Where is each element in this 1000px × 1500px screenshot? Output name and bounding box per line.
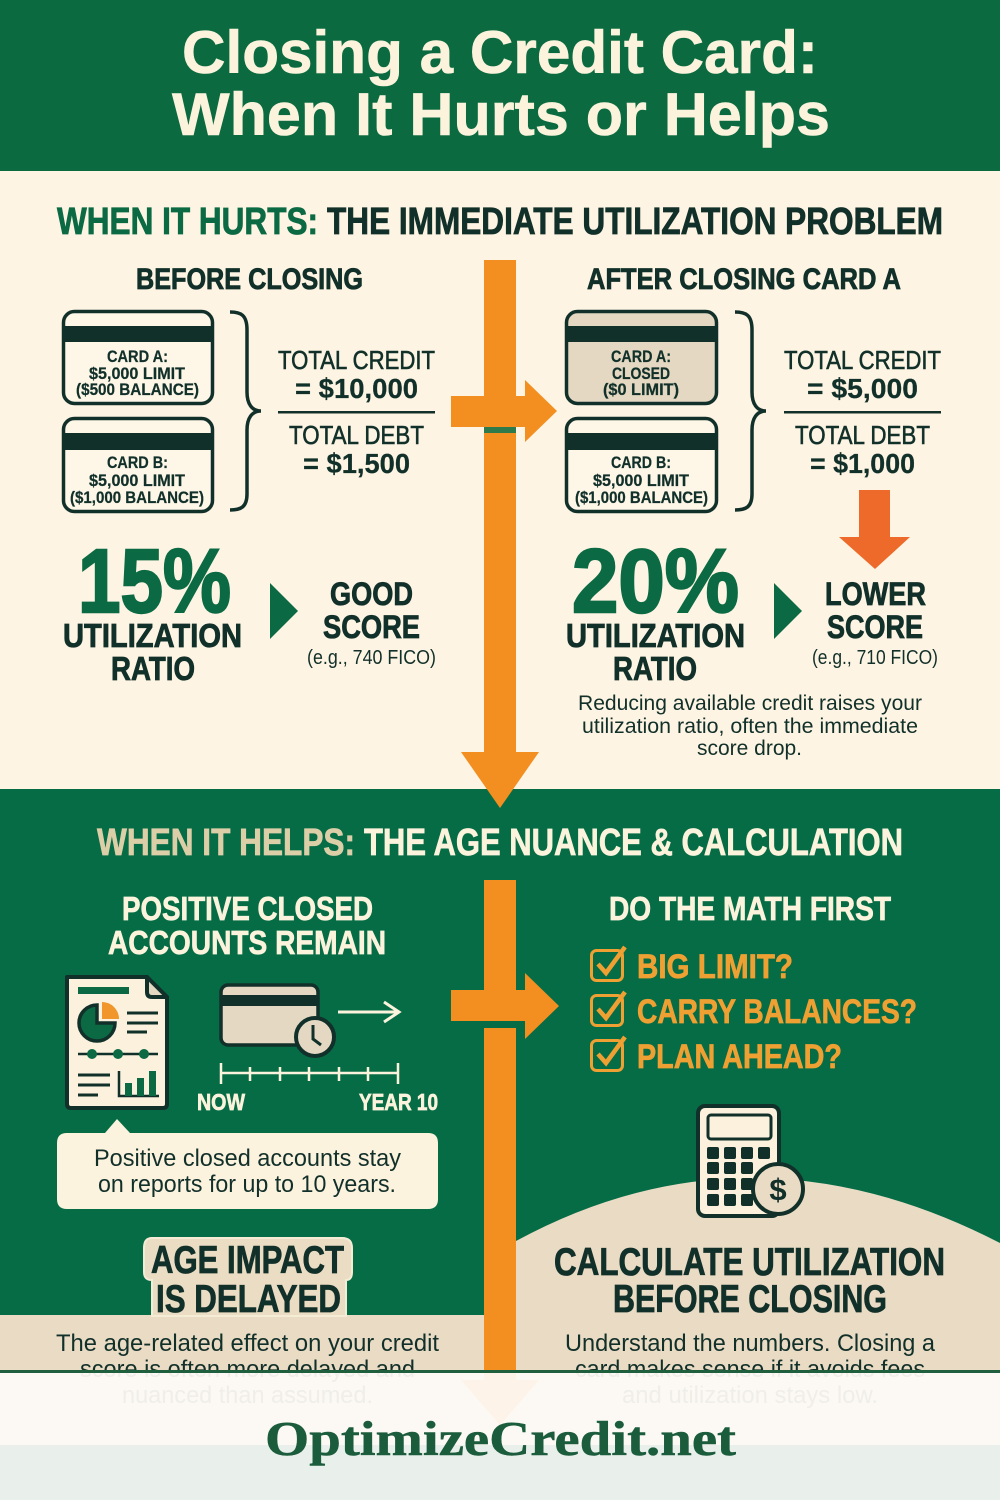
arrow: vertical top with head — [461, 260, 539, 808]
result: good score: SCORE — [323, 609, 420, 645]
card: card B before: CARD B: — [107, 453, 168, 472]
callout: closed accounts on reports: Positive closed accounts stay — [94, 1145, 401, 1172]
stat: 15 percent utilization: UTILIZATION — [63, 617, 242, 654]
green notch: top — [484, 427, 516, 433]
card: card A closed: CLOSED — [612, 364, 670, 383]
body text: understand the numbers — [565, 1330, 936, 1409]
body text: age effect: score is often more delayed and — [80, 1356, 415, 1383]
footer — [0, 1370, 1000, 1500]
card: card A closed — [566, 312, 716, 404]
arrow: horizontal top — [451, 380, 557, 442]
header band — [0, 0, 1000, 171]
stat: 20 percent utilization: 20% — [572, 532, 739, 632]
card: card A before: ($500 BALANCE) — [76, 380, 199, 399]
panel: when it hurts — [0, 171, 1000, 789]
heading: before closing: BEFORE CLOSING — [136, 263, 363, 296]
arrow: score falls — [839, 490, 910, 569]
stat: 20 percent utilization: RATIO — [613, 650, 697, 687]
green notch: bottom — [484, 1021, 516, 1028]
arrow: vertical bottom with faded head — [461, 880, 539, 1425]
totals: after: TOTAL DEBT — [795, 420, 930, 450]
timeline: YEAR 10 — [359, 1089, 438, 1115]
check item: plan ahead — [592, 1037, 842, 1076]
caption: utilization explanation: score drop. — [697, 737, 802, 760]
stat: 20 percent utilization: UTILIZATION — [566, 617, 745, 654]
arrow: to lower score — [774, 583, 802, 639]
brace: before — [230, 312, 261, 510]
timeline — [197, 1063, 438, 1115]
stat: 15 percent utilization: 15% — [78, 532, 231, 632]
heading: after closing card A: AFTER CLOSING CARD A — [587, 263, 901, 296]
card: card A before: $5,000 LIMIT — [89, 364, 186, 383]
check item: big limit: BIG LIMIT? — [637, 948, 793, 986]
card: card B after: $5,000 LIMIT — [593, 471, 690, 490]
result: lower score — [812, 576, 938, 669]
totals: after: = $1,000 — [810, 448, 915, 479]
title — [172, 19, 830, 148]
body text: age effect: The age-related effect on your credit — [56, 1330, 439, 1357]
heading: positive closed accounts remain: POSITIVE CLOSED — [122, 890, 373, 927]
card: card B after: CARD B: — [611, 453, 671, 472]
body text: understand the numbers: card makes sense if it avoids fees — [575, 1356, 925, 1383]
strip under footer — [484, 1371, 516, 1445]
totals: before: = $1,500 — [303, 448, 410, 479]
card: card B before — [64, 418, 212, 512]
totals: before: = $10,000 — [295, 373, 418, 404]
icon: credit report document — [67, 977, 167, 1108]
totals: before: TOTAL DEBT — [289, 420, 424, 450]
heading: when it hurts — [57, 201, 943, 243]
card: card B after: ($1,000 BALANCE) — [575, 488, 708, 507]
caption: utilization explanation: Reducing available credit raises your — [578, 692, 922, 715]
result: good score: GOOD — [330, 576, 413, 612]
timeline: NOW — [197, 1089, 245, 1115]
caption: utilization explanation: utilization ratio, often the immediate — [582, 715, 918, 738]
result: lower score: (e.g., 710 FICO) — [812, 647, 938, 669]
body text: age effect — [56, 1330, 439, 1409]
body text: age effect: nuanced than assumed. — [122, 1382, 373, 1409]
callout: closed accounts on reports: on reports for up to 10 years. — [98, 1171, 396, 1198]
card: card B after — [566, 418, 716, 512]
stat: 15 percent utilization: RATIO — [111, 650, 195, 687]
card: card A before — [64, 312, 212, 404]
check item: big limit — [592, 947, 793, 986]
card: card A closed: CARD A: — [611, 347, 671, 366]
stat: 15 percent utilization — [63, 532, 242, 687]
heading: when it hurts: WHEN IT HURTS: — [57, 201, 318, 243]
heading: when it helps — [97, 822, 903, 864]
caption: utilization explanation — [578, 692, 922, 760]
totals: before: TOTAL CREDIT — [278, 345, 435, 375]
result: lower score: LOWER — [825, 576, 926, 612]
heading: age impact is delayed: AGE IMPACT — [151, 1239, 344, 1282]
arrow: time passing — [338, 1002, 399, 1022]
stat: 20 percent utilization — [566, 532, 745, 687]
heading: calculate utilization — [554, 1241, 945, 1321]
icon: calculator with dollar coin — [698, 1106, 803, 1216]
totals: after: TOTAL CREDIT — [784, 345, 941, 375]
body text: understand the numbers: and utilization stays low. — [622, 1382, 878, 1409]
heading: do the math first: DO THE MATH FIRST — [609, 890, 891, 927]
card: card B before: $5,000 LIMIT — [89, 471, 186, 490]
card: card A closed: ($0 LIMIT) — [603, 380, 679, 399]
body text: understand the numbers: Understand the numbers. Closing a — [565, 1330, 936, 1357]
result: good score — [307, 576, 436, 669]
brace: after — [735, 312, 766, 510]
heading: when it helps: WHEN IT HELPS: — [97, 822, 355, 864]
beige base: left — [0, 1315, 484, 1445]
heading: age impact is delayed: IS DELAYED — [156, 1278, 341, 1321]
check item: carry balances: CARRY BALANCES? — [637, 993, 917, 1031]
result: lower score: SCORE — [827, 609, 923, 645]
beige base: right arc — [516, 1178, 1000, 1445]
heading: positive closed accounts remain — [108, 890, 386, 961]
check item: plan ahead: PLAN AHEAD? — [637, 1038, 842, 1076]
title: When It Hurts or Helps — [172, 81, 830, 148]
totals: after — [784, 345, 941, 479]
callout: closed accounts on reports — [57, 1119, 438, 1209]
panel: when it helps — [0, 789, 1000, 1445]
heading: positive closed accounts remain: ACCOUNTS REMAIN — [108, 924, 386, 961]
heading: calculate utilization: BEFORE CLOSING — [613, 1278, 887, 1321]
title: Closing a Credit Card: — [182, 19, 818, 86]
heading: age impact is delayed — [144, 1238, 352, 1321]
arrow: to good score — [270, 583, 298, 639]
icon: closed card with clock — [221, 985, 334, 1056]
result: good score: (e.g., 740 FICO) — [307, 647, 436, 669]
footer brand: OptimizeCredit.net — [265, 1411, 737, 1466]
card: card A before: CARD A: — [107, 347, 168, 366]
checklist — [592, 947, 917, 1076]
card: card B before: ($1,000 BALANCE) — [70, 488, 204, 507]
arrow: horizontal bottom — [451, 973, 559, 1039]
icon: calculator with dollar coin: $ — [769, 1172, 787, 1207]
totals: before — [278, 345, 435, 479]
totals: after: = $5,000 — [807, 373, 918, 404]
